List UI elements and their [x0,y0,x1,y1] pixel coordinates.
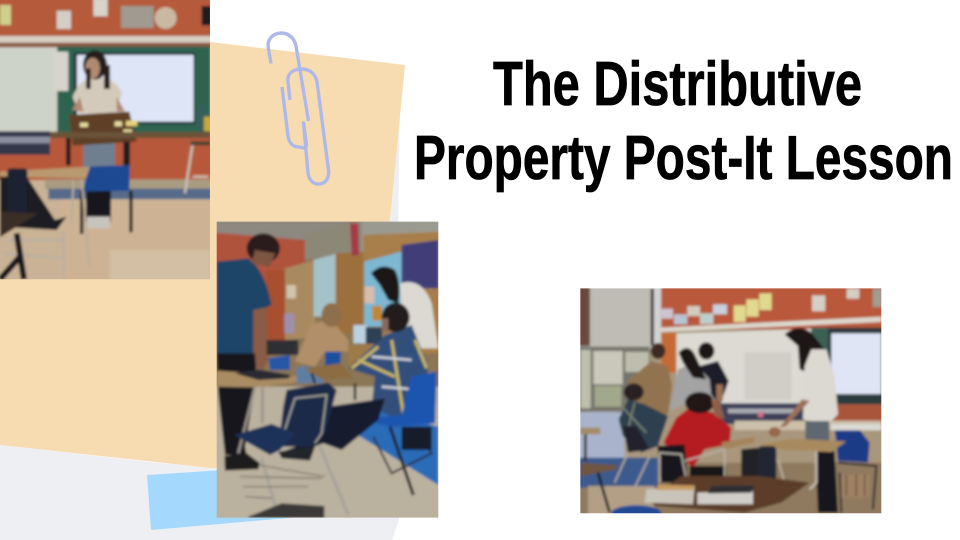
title [414,50,953,193]
student in plaid [348,325,428,418]
stool [185,143,208,193]
front desks [760,439,846,452]
photo: students seated at desks with the teacher helping [215,220,442,520]
photo: teacher at a lectern in front of a screen [0,0,213,283]
teacher [785,328,825,373]
seated student plaid [619,399,668,453]
desk behind [721,437,755,449]
paper letters [661,309,673,319]
desk with book [267,340,298,355]
whiteboard and screen [676,329,811,404]
blue chair [835,425,870,463]
seated student in beige [295,320,348,367]
decorative blue paper [147,465,300,530]
wall items [0,5,11,25]
icon: upper paperclip [268,33,308,121]
floor [578,463,885,516]
red hoodie student [663,408,731,468]
lectern [69,112,137,146]
small desk [305,368,338,381]
chair backs [657,444,688,483]
teacher [83,143,115,170]
mat [248,503,324,518]
floor [215,387,442,520]
decorative peach paper [0,0,405,470]
icon: paperclips [268,33,329,184]
blue chair [83,165,130,191]
dark chair [278,383,337,447]
blue chair [375,370,438,427]
decorative grey paper [0,90,400,540]
icon: lower paperclip [282,69,329,184]
foreground desk and chair [0,167,90,178]
legs [278,398,385,453]
left desks [580,428,600,434]
photo: class gathered around desks near a whiteboard [578,286,885,520]
teacher [400,282,438,348]
standing students [628,361,672,414]
windows [578,347,650,412]
student standing [217,258,272,357]
title line 1: The Distributive [493,50,862,119]
